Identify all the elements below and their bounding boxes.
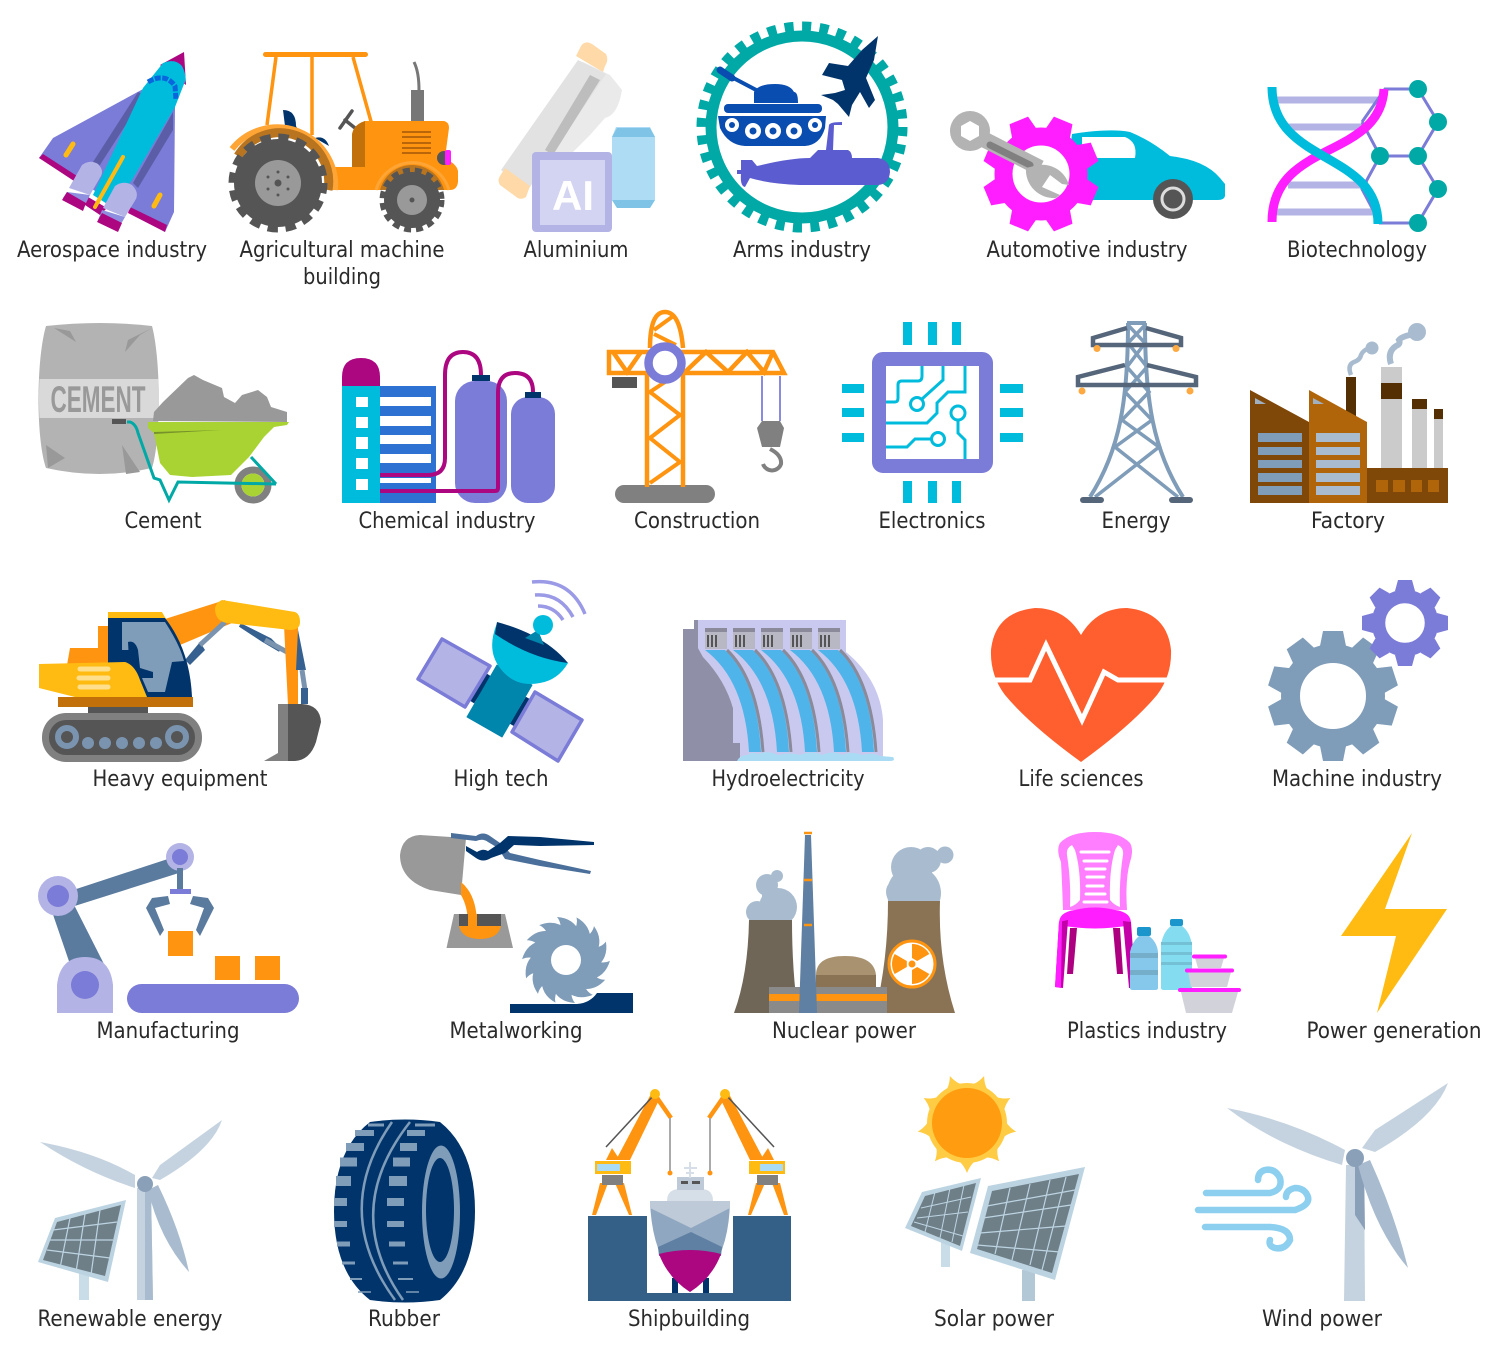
panel: Renewable energy <box>38 1120 223 1332</box>
icon: tower crane <box>609 312 784 503</box>
icon: microchip <box>842 322 1023 503</box>
icon: wind turbine <box>1227 1083 1448 1301</box>
label: Agricultural machine <box>240 238 444 263</box>
panel: Solar power <box>905 1071 1085 1332</box>
icon: bottles and containers <box>1130 919 1239 1013</box>
icon: factory <box>1250 323 1448 503</box>
icon: DNA helix and molecule <box>1272 80 1447 232</box>
panel: Nuclear power <box>734 833 955 1044</box>
panel: Aerospace industry <box>17 52 207 263</box>
label: Cement <box>124 509 202 534</box>
icon: space shuttle <box>39 52 186 232</box>
panel: Aluminium <box>498 42 655 263</box>
icon: crucible, tongs and mould <box>400 833 594 948</box>
panel: Wind power <box>1198 1083 1448 1332</box>
label: Wind power <box>1262 1307 1383 1332</box>
icon: satellite <box>418 582 585 761</box>
label: Factory <box>1311 509 1385 534</box>
icon: submarine <box>737 122 890 187</box>
icon: large gear <box>1267 631 1399 761</box>
label <box>240 238 444 290</box>
icon: lightning bolt <box>1341 833 1447 1013</box>
label: Aerospace industry <box>17 238 207 263</box>
icon: foil roll, AI block and can <box>498 42 655 232</box>
panel: Chemical industry <box>342 352 555 534</box>
panel: Automotive industry <box>950 111 1225 263</box>
label: Hydroelectricity <box>712 767 865 792</box>
icon: small gear <box>1362 580 1448 666</box>
label: Biotechnology <box>1287 238 1427 263</box>
panel: Arms industry <box>702 27 902 263</box>
panel: Shipbuilding <box>588 1089 791 1332</box>
label: Nuclear power <box>772 1019 917 1044</box>
icon: wheelbarrow <box>112 375 289 500</box>
label: building <box>303 265 381 290</box>
label: Aluminium <box>524 238 628 263</box>
panel: Rubber <box>334 1120 475 1332</box>
panel: Manufacturing <box>38 843 299 1044</box>
label: Rubber <box>368 1307 441 1332</box>
label: Manufacturing <box>96 1019 240 1044</box>
icon: excavator <box>39 600 321 762</box>
icon: tanks and pipes <box>380 352 555 503</box>
panel: Plastics industry <box>1055 832 1239 1044</box>
label: Energy <box>1102 509 1171 534</box>
icon: robot arm and conveyor <box>38 843 299 1013</box>
icon: fighter jet <box>821 36 878 117</box>
icon: hull <box>650 1162 730 1293</box>
panel: Construction <box>609 312 784 534</box>
panel: Metalworking <box>400 833 633 1044</box>
icon: car wheel <box>1153 179 1193 219</box>
icon: tyre <box>334 1120 475 1302</box>
icon: car <box>1070 130 1225 200</box>
icon: stack <box>799 833 817 1013</box>
icon: reactor dome <box>769 956 887 1013</box>
label: High tech <box>454 767 548 792</box>
panel: High tech <box>418 582 585 792</box>
label: Construction <box>634 509 760 534</box>
panel: Life sciences <box>991 608 1171 792</box>
icon: right dock crane <box>708 1089 788 1215</box>
label: Life sciences <box>1018 767 1144 792</box>
icon: transmission tower <box>1078 323 1196 503</box>
icon: dam <box>683 620 894 761</box>
icon: heart with pulse <box>991 608 1171 762</box>
icon: car window <box>1082 137 1136 158</box>
panel: Agricultural machine building <box>232 52 458 290</box>
icon: wind turbine <box>40 1120 222 1300</box>
panel: Heavy equipment <box>39 600 321 792</box>
panel: Energy <box>1078 323 1196 534</box>
icon: tractor <box>232 52 458 230</box>
panel: Factory <box>1250 323 1448 534</box>
panel: Cement <box>38 323 289 534</box>
icon: cement bag <box>38 323 159 474</box>
panel: Biotechnology <box>1272 80 1447 263</box>
icon: left dock crane <box>592 1089 672 1215</box>
icon: small solar panel <box>905 1178 981 1267</box>
icon: cooling tower left <box>734 870 798 1013</box>
label: Electronics <box>878 509 986 534</box>
label: Automotive industry <box>986 238 1188 263</box>
label: Chemical industry <box>358 509 536 534</box>
label: Shipbuilding <box>628 1307 750 1332</box>
label: Machine industry <box>1272 767 1442 792</box>
icon: wrench <box>950 111 1069 198</box>
icon: sun <box>915 1071 1019 1173</box>
panel: Hydroelectricity <box>683 620 894 792</box>
icon: solar panel <box>38 1200 126 1300</box>
label: Power generation <box>1306 1019 1482 1044</box>
panel: Electronics <box>842 322 1023 534</box>
icon: plastic chair <box>1055 832 1134 988</box>
label: Arms industry <box>733 238 871 263</box>
icon: dry dock <box>588 1216 791 1301</box>
icon: building <box>342 358 436 503</box>
icon: tank <box>718 70 826 146</box>
panel: Machine industry <box>1267 580 1448 792</box>
icon: magenta gear <box>982 115 1100 233</box>
label: Plastics industry <box>1067 1019 1227 1044</box>
icon: foil roll, AI block and can: AI <box>552 172 594 219</box>
label: Metalworking <box>450 1019 582 1044</box>
label: Renewable energy <box>38 1307 223 1332</box>
icon: cooling tower right with radiation symbol <box>875 846 955 1013</box>
icon: circular saw <box>510 915 633 1013</box>
label: Heavy equipment <box>92 767 268 792</box>
icon: cement bag: CEMENT <box>50 379 146 420</box>
icon: wind gust <box>1198 1170 1308 1248</box>
panel: Power generation <box>1306 833 1482 1044</box>
icon: large solar panel <box>970 1167 1085 1301</box>
icon: gear ring <box>702 27 902 227</box>
label: Solar power <box>934 1307 1055 1332</box>
